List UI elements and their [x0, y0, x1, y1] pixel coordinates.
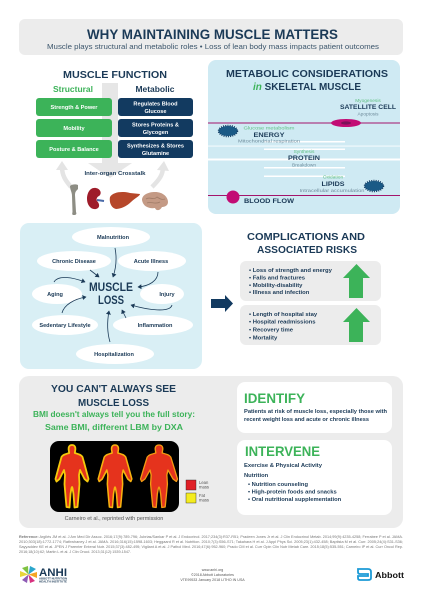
- centre label: muscle loss: [89, 280, 133, 307]
- wordmark: institute name: [39, 578, 67, 584]
- risk box: hospital: • Recovery time: [249, 328, 294, 334]
- panel: muscle function: [36, 69, 193, 215]
- cause: aging: Aging: [47, 292, 63, 298]
- heading: muscle function: MUSCLE FUNCTION: [63, 69, 167, 81]
- panel: metabolic considerations: [208, 60, 400, 214]
- icon: liver: [110, 192, 140, 209]
- wordmark: institute name: HEALTH INSTITUTE: [39, 580, 67, 584]
- icon: kidney: [87, 188, 104, 209]
- body scan left: [56, 445, 88, 508]
- footer credits: ©2018 Abbott Laboratories: [191, 573, 234, 577]
- icon: up arrow: [343, 264, 370, 298]
- label: apoptosis: Apoptosis: [357, 112, 379, 118]
- subtitle: Muscle plays structural and metabolic roles • Loss of lean body mass impacts patient outcomes: [47, 42, 379, 51]
- cause: inflammation: Inflammation: [138, 323, 173, 329]
- cause: injury: [140, 284, 184, 304]
- box: synthesizes and stores glutamine: Synthesizes & Stores: [127, 144, 184, 150]
- panel: bottom section: [19, 376, 403, 528]
- centre label: muscle loss: LOSS: [98, 293, 124, 307]
- logo: Abbott: [358, 569, 404, 580]
- icon: pinwheel: [20, 566, 37, 583]
- label: synthesis: Synthesis: [294, 149, 315, 155]
- box: intervene: Nutrition: [244, 473, 269, 479]
- label: blood flow: BLOOD FLOW: [244, 198, 295, 205]
- box: intervene: • Oral nutritional supplementation: [248, 497, 342, 503]
- arrow: muscle loss to complications: [211, 295, 233, 312]
- label: myogenesis: Myogenesis: [355, 98, 381, 104]
- cause: inflammation: [113, 315, 193, 335]
- box: posture and balance: [36, 140, 112, 158]
- icon: brain: [142, 192, 168, 210]
- upper membrane line: [208, 122, 400, 124]
- references: [19, 535, 403, 554]
- cause: malnutrition: [72, 227, 150, 247]
- heading: you can't always see muscle loss: YOU CAN'T ALWAYS SEE: [51, 383, 176, 395]
- box: mobility: [36, 119, 112, 137]
- label: mitochondrial respiration: Mitochondrial respiration: [238, 138, 300, 144]
- references: 2016;18(10):62; Martin L et al. J Clin Oncol. 2013;31(12):1539-1547.: [19, 550, 131, 554]
- label: satellite cell: SATELLITE CELL: [340, 104, 396, 111]
- icon: Abbott symbol: [358, 569, 371, 580]
- box: intervene: • Nutrition counseling: [248, 482, 308, 488]
- box: stores proteins and glycogen: Glycogen: [143, 130, 169, 136]
- icon: up arrow: [343, 308, 370, 342]
- arrow: left crosstalk: [56, 161, 71, 187]
- header banner: [19, 19, 403, 55]
- legend: lean mass: [186, 480, 209, 490]
- cause: acute illness: [118, 251, 186, 271]
- risk box: functional: • Illness and infection: [249, 290, 310, 296]
- risk box: hospital: • Hospital readmissions: [249, 320, 316, 326]
- label: inter-organ crosstalk: Inter-organ Crosstalk: [84, 171, 146, 177]
- risk box: functional: • Falls and fractures: [249, 276, 306, 282]
- label: protein: PROTEIN: [288, 155, 320, 162]
- legend: lean mass: mass: [199, 484, 209, 490]
- heading: complications: COMPLICATIONS AND: [247, 231, 365, 243]
- heading: you can't always see muscle loss: MUSCLE LOSS: [78, 397, 149, 409]
- box: identify: IDENTIFY: [244, 390, 306, 406]
- legend: lean mass: Lean: [199, 480, 209, 485]
- references: 2010;303(18):1772-1774; Rathwhaney J et al. JAMA. 2016;316(15):1598-1603; Heggaard R et al. Nutrition. 2010;7(3):S56-S71; Takahara H et al. J Appl Phys Sci. 2005;23(1):432-458; Baptista M et al. Curr. 2005;24(4):S31-S36;: [19, 540, 403, 544]
- logo: ANHI: [20, 566, 67, 584]
- label: intracellular accumulation: Intracellular accumulation: [300, 188, 365, 194]
- panel: muscle loss causes: [20, 223, 202, 369]
- box: synthesizes and stores glutamine: [118, 140, 193, 158]
- risk box: functional: [240, 261, 381, 301]
- body scan right: [141, 445, 177, 508]
- column heading: metabolic: Metabolic: [136, 85, 175, 94]
- cause: acute illness: Acute Illness: [134, 259, 168, 265]
- centre label: muscle loss: MUSCLE: [89, 280, 133, 294]
- cause: chronic disease: Chronic Disease: [52, 259, 96, 265]
- icon: muscle cell bottom: [364, 180, 384, 192]
- box: intervene: • High-protein foods and snacks: [248, 490, 337, 496]
- wordmark: institute name: ABBOTT NUTRITION: [39, 578, 67, 580]
- legend: fat mass: Fat: [199, 493, 206, 498]
- box: intervene: Exercise & Physical Activity: [244, 463, 323, 469]
- icon: satellite cell: [331, 119, 361, 127]
- legend: fat mass: [186, 493, 209, 503]
- heading: you can't always see muscle loss: [51, 383, 176, 409]
- icon: blood cell: [226, 190, 240, 204]
- body scan middle: [98, 445, 132, 508]
- box: regulates blood glucose: [118, 98, 193, 116]
- references: Sayyaddev KE et al. JPEN J Parenter Enteral Nutr. 2015;37(3):482-495; Vigilant A et al. J Pathol Med. 2016;47(6):952-960; Prado CM et al. Curr Opin Clin Nutr Metab Care. 2015;18(5):535-551; Carneiro IP et al. Curr Oncol Rep.: [19, 545, 403, 549]
- footer credits: www.anhi.org: [202, 568, 223, 572]
- heading: complications: [247, 231, 365, 256]
- box: strength and power: [36, 98, 112, 116]
- risk box: hospital: • Length of hospital stay: [249, 312, 318, 318]
- muscle fibre stripes: [208, 141, 400, 177]
- risk box: functional: • Loss of strength and energy: [249, 268, 333, 274]
- background crosstalk arrow: [88, 83, 132, 178]
- box: stores proteins and glycogen: Stores Proteins &: [132, 122, 179, 128]
- risk box: hospital: [240, 305, 381, 345]
- heading: metabolic considerations: METABOLIC CONSIDERATIONS: [226, 68, 388, 80]
- cause: hospitalization: [76, 344, 154, 364]
- title: WHY MAINTAINING MUSCLE MATTERS: [87, 26, 338, 42]
- box: regulates blood glucose: Regulates Blood: [133, 102, 178, 108]
- box: intervene: INTERVENE: [245, 443, 320, 459]
- panel: complications and risks: [240, 231, 381, 345]
- subheading: BMI note: BMI doesn't always tell you the full story:: [33, 410, 195, 419]
- box: strength and power: Strength & Power: [51, 105, 98, 111]
- cause: hospitalization: Hospitalization: [94, 352, 134, 358]
- footer credits: VTE99533 January 2018 LITHO IN USA: [180, 578, 245, 582]
- label: oxidation: Oxidation: [323, 174, 343, 180]
- wordmark: Abbott: Abbott: [375, 571, 404, 580]
- box: regulates blood glucose: Glucose: [144, 109, 167, 115]
- box: intervene: [237, 440, 392, 515]
- box: synthesizes and stores glutamine: Glutamine: [142, 151, 169, 157]
- icon: muscle cell top: [218, 126, 238, 136]
- column heading: structural: Structural: [53, 85, 93, 94]
- box: identify: [237, 382, 392, 433]
- footer credits: [180, 568, 245, 582]
- icon: bone: [70, 184, 78, 215]
- box: posture and balance: Posture & Balance: [49, 147, 99, 153]
- cause: sedentary lifestyle: Sedentary Lifestyle: [39, 323, 91, 329]
- box: identify: Patients at risk of muscle loss, especially those with: [244, 409, 387, 415]
- subheading: BMI note: [33, 410, 195, 432]
- cause: injury: Injury: [159, 292, 176, 298]
- label: energy: ENERGY: [254, 132, 285, 139]
- box: stores proteins and glycogen: [118, 119, 193, 137]
- cause: aging: [32, 284, 82, 304]
- references: Reference: Argilés JM et al. J Am Med Dir Assoc. 2016;17(9):789-796; Jubrias/Sankar P et al. J Endocrinol. 2017;234(3):R37-R51; Pradeen Jones Jr et al. J Clin Endocrinol Metab. 2014;99(9):4235-4258; Ferrabee P et al. JAMA.: [19, 535, 403, 539]
- heading: in skeletal muscle: in SKELETAL MUSCLE: [253, 81, 361, 93]
- risk box: hospital: • Mortality: [249, 336, 278, 342]
- risk box: functional: • Mobility-disability: [249, 283, 303, 289]
- label: glucose metabolism: Glucose metabolism: [244, 126, 294, 132]
- label: lipids: LIPIDS: [322, 181, 345, 188]
- arrows into muscle loss: [54, 248, 172, 342]
- label: breakdown: Breakdown: [292, 162, 316, 168]
- box: identify: recent weight loss and acute or chronic illness: [244, 417, 369, 423]
- wordmark: ANHI: ANHI: [39, 567, 67, 579]
- cause: malnutrition: Malnutrition: [97, 235, 130, 241]
- caption: Carneiro et al., reprinted with permission: [65, 516, 163, 522]
- legend: fat mass: mass: [199, 498, 209, 502]
- heading: complications: ASSOCIATED RISKS: [257, 244, 357, 256]
- cause: chronic disease: [37, 251, 111, 271]
- figure: DXA body scans: [50, 441, 179, 512]
- lower blood vessel line: [208, 195, 400, 196]
- cause: sedentary lifestyle: [32, 315, 98, 335]
- arrow: right crosstalk: [152, 161, 169, 187]
- box: mobility: Mobility: [63, 126, 85, 132]
- subheading: BMI note: Same BMI, different LBM by DXA: [45, 423, 183, 432]
